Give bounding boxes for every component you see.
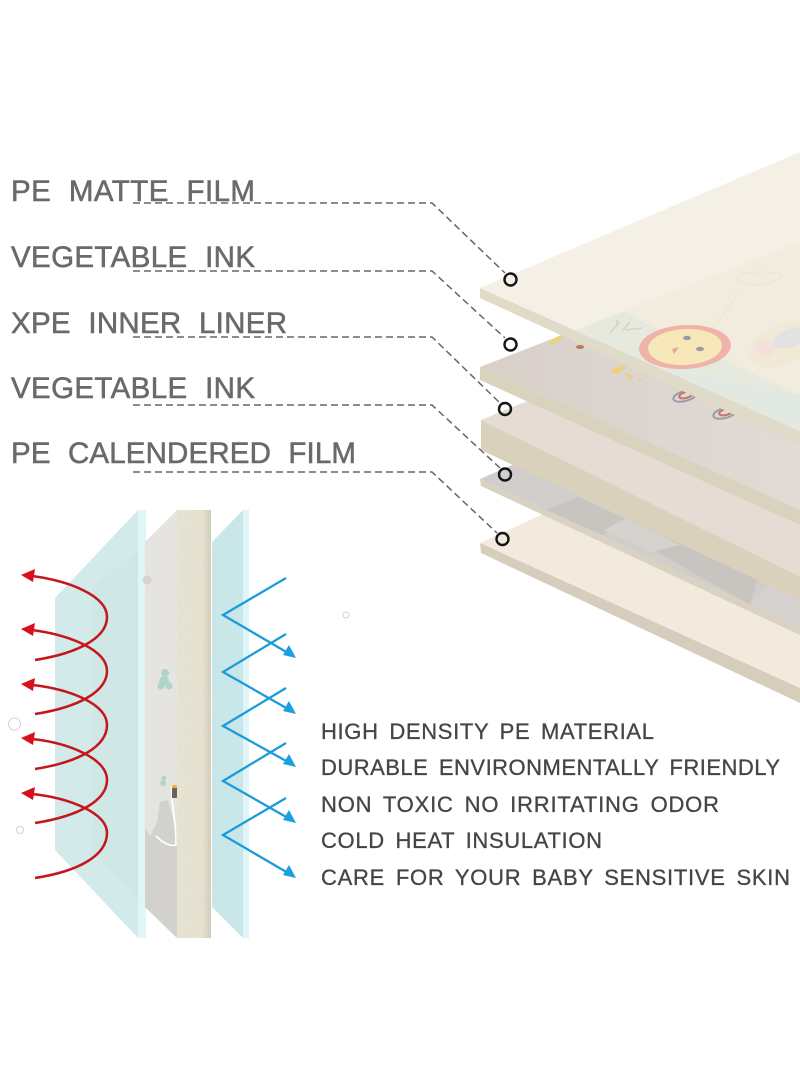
label: PE matte film: PE MATTE FILM (11, 175, 255, 208)
printed yellow marks (548, 336, 642, 382)
feature: material: HIGH DENSITY PE MATERIAL (321, 719, 654, 744)
connector: XPE inner liner (133, 337, 500, 403)
layer 2: vegetable ink, printed surface (480, 242, 800, 525)
panel: printed layer (142, 510, 177, 938)
connector: vegetable ink lower (133, 405, 500, 468)
red heat arrows (21, 569, 107, 878)
layer 4: vegetable ink, grey print (480, 400, 800, 635)
print: green tree (158, 669, 172, 786)
feature: non toxic: NON TOXIC NO IRRITATING ODOR (321, 792, 719, 817)
connector: PE matte film (133, 203, 505, 273)
small decorative circles (8, 612, 349, 834)
label: XPE inner liner: XPE INNER LINER (11, 307, 287, 340)
feature: durable: DURABLE ENVIRONMENTALLY FRIENDLY (321, 755, 780, 780)
print: mountain (145, 800, 177, 938)
print seen through film (573, 242, 800, 431)
layer 5: PE calendered film (480, 400, 800, 703)
blue cold arrows (223, 578, 296, 878)
layer 3: XPE inner liner (481, 300, 800, 600)
feature: care: CARE FOR YOUR BABY SENSITIVE SKIN (321, 865, 790, 890)
insulation cross-section diagram (21, 510, 296, 938)
panel: right film (212, 510, 249, 938)
panel: foam core (177, 510, 211, 938)
marker rings (496, 274, 516, 545)
label: vegetable ink: VEGETABLE INK (11, 241, 255, 274)
label: vegetable ink lower: VEGETABLE INK (11, 372, 255, 405)
connector: PE calendered film (133, 472, 497, 533)
feature list (321, 719, 790, 890)
label: PE calendered film: PE CALENDERED FILM (11, 437, 356, 470)
layer 1: PE matte film (480, 152, 800, 445)
lion face (638, 323, 732, 371)
connector: vegetable ink (133, 271, 505, 338)
layer stack: exploded mat layers (480, 152, 800, 703)
printed rainbow marks (672, 388, 738, 421)
panel: left film (55, 510, 146, 938)
feature: insulation: COLD HEAT INSULATION (321, 828, 602, 853)
